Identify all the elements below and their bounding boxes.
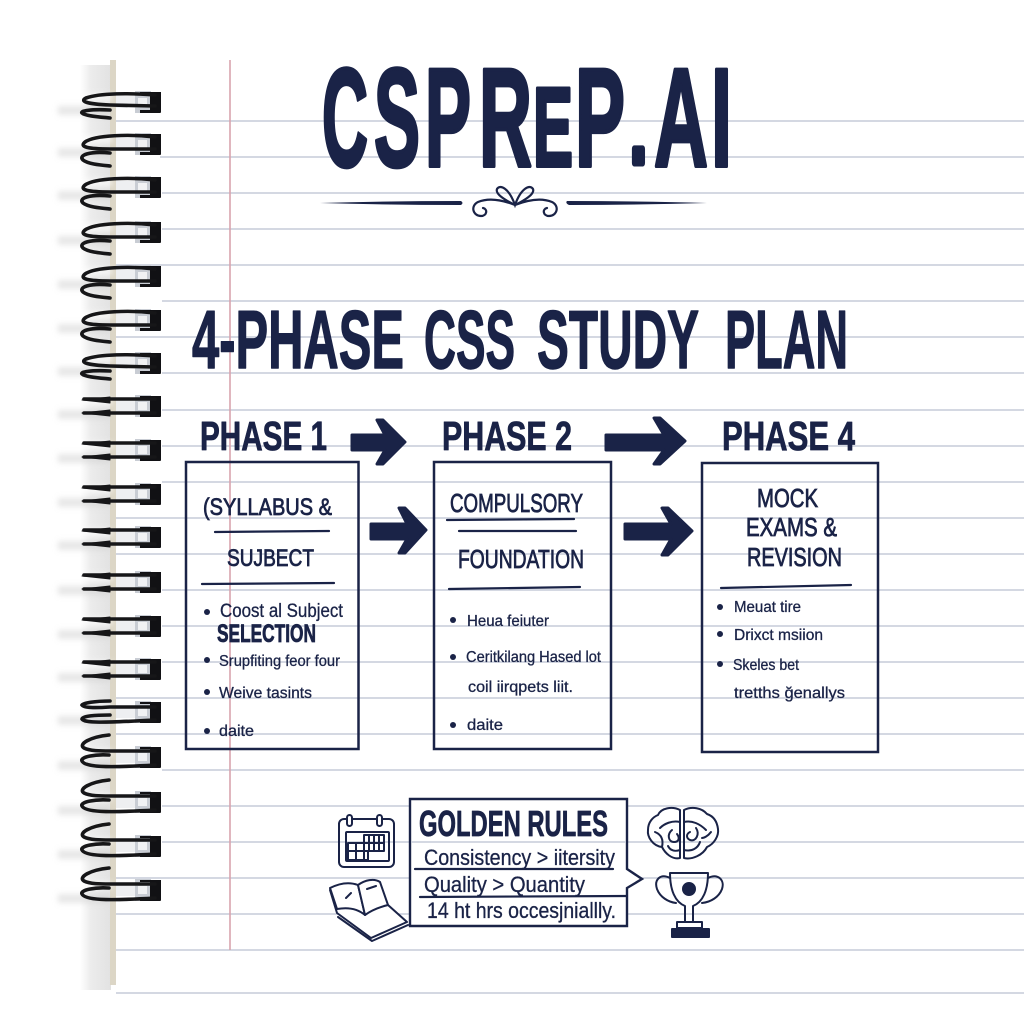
callout: golden rules: Quality > Quantity (424, 872, 585, 897)
panel: phase 1: (SYLLABUS & (203, 494, 332, 521)
panel: phase 2: daite (467, 717, 503, 734)
panel: phase 4: Skeles bet (733, 657, 799, 674)
panel: phase 1: Weive tasints (219, 685, 312, 702)
panel: phase 4 (702, 463, 878, 752)
panel: phase 4: REVISION (747, 542, 842, 572)
title: I (711, 39, 732, 196)
title: S (374, 39, 420, 196)
panel: phase 1: Srupfiting feor four (219, 653, 341, 670)
title: R (479, 39, 532, 196)
phase labels (200, 413, 855, 459)
panel: phase 2: coil iirqpets liit. (468, 679, 573, 696)
heading: STUDY (537, 293, 699, 386)
callout: golden rules (410, 799, 642, 926)
panel: phase 4: MOCK (757, 483, 819, 513)
phase labels: PHASE 2 (442, 413, 572, 459)
icon: trophy (656, 873, 723, 937)
title: P (575, 39, 625, 196)
phase labels: PHASE 1 (200, 413, 327, 459)
panel: phase 2: Ceritkilang Hased lot (466, 649, 602, 666)
panel: phase 1: daite (219, 723, 254, 740)
title (322, 39, 732, 196)
panel: phase 1: Coost al Subject (220, 601, 344, 622)
callout: golden rules: Consistency > iitersity (424, 845, 615, 870)
heading: CSS (424, 293, 515, 386)
panel: phase 4: tretths ğenallys (734, 685, 845, 702)
panel: phase 2 (434, 462, 611, 749)
title: E (533, 65, 573, 190)
panel: phase 2: Heua feiuter (467, 613, 550, 630)
panel: phase 2: COMPULSORY (450, 488, 583, 518)
title: C (322, 39, 368, 196)
callout: golden rules: GOLDEN RULES (419, 803, 608, 844)
panel: phase 4: Drixct msiion (734, 627, 823, 644)
title flourish (320, 187, 707, 216)
panel: phase 1: SELECTION (217, 620, 316, 648)
heading (192, 293, 848, 386)
spiral binding (58, 91, 161, 903)
arrows (352, 418, 692, 555)
heading: 4-PHASE (192, 293, 404, 386)
panel: phase 1 (186, 462, 358, 749)
icon: calendar (339, 815, 394, 867)
icon: open book (330, 880, 408, 941)
phase labels: PHASE 4 (722, 413, 855, 459)
panel: phase 2: FOUNDATION (458, 544, 584, 574)
callout: golden rules: 14 ht hrs occesjniallly. (427, 898, 616, 923)
icon: brain (648, 808, 718, 858)
title: P (425, 39, 471, 196)
panel: phase 4: EXAMS & (746, 512, 837, 542)
title: . (630, 78, 647, 184)
panel: phase 1: SUJBECT (227, 545, 314, 572)
panel: phase 4: Meuat tire (734, 599, 801, 616)
title: A (654, 39, 708, 196)
heading: PLAN (725, 293, 848, 386)
